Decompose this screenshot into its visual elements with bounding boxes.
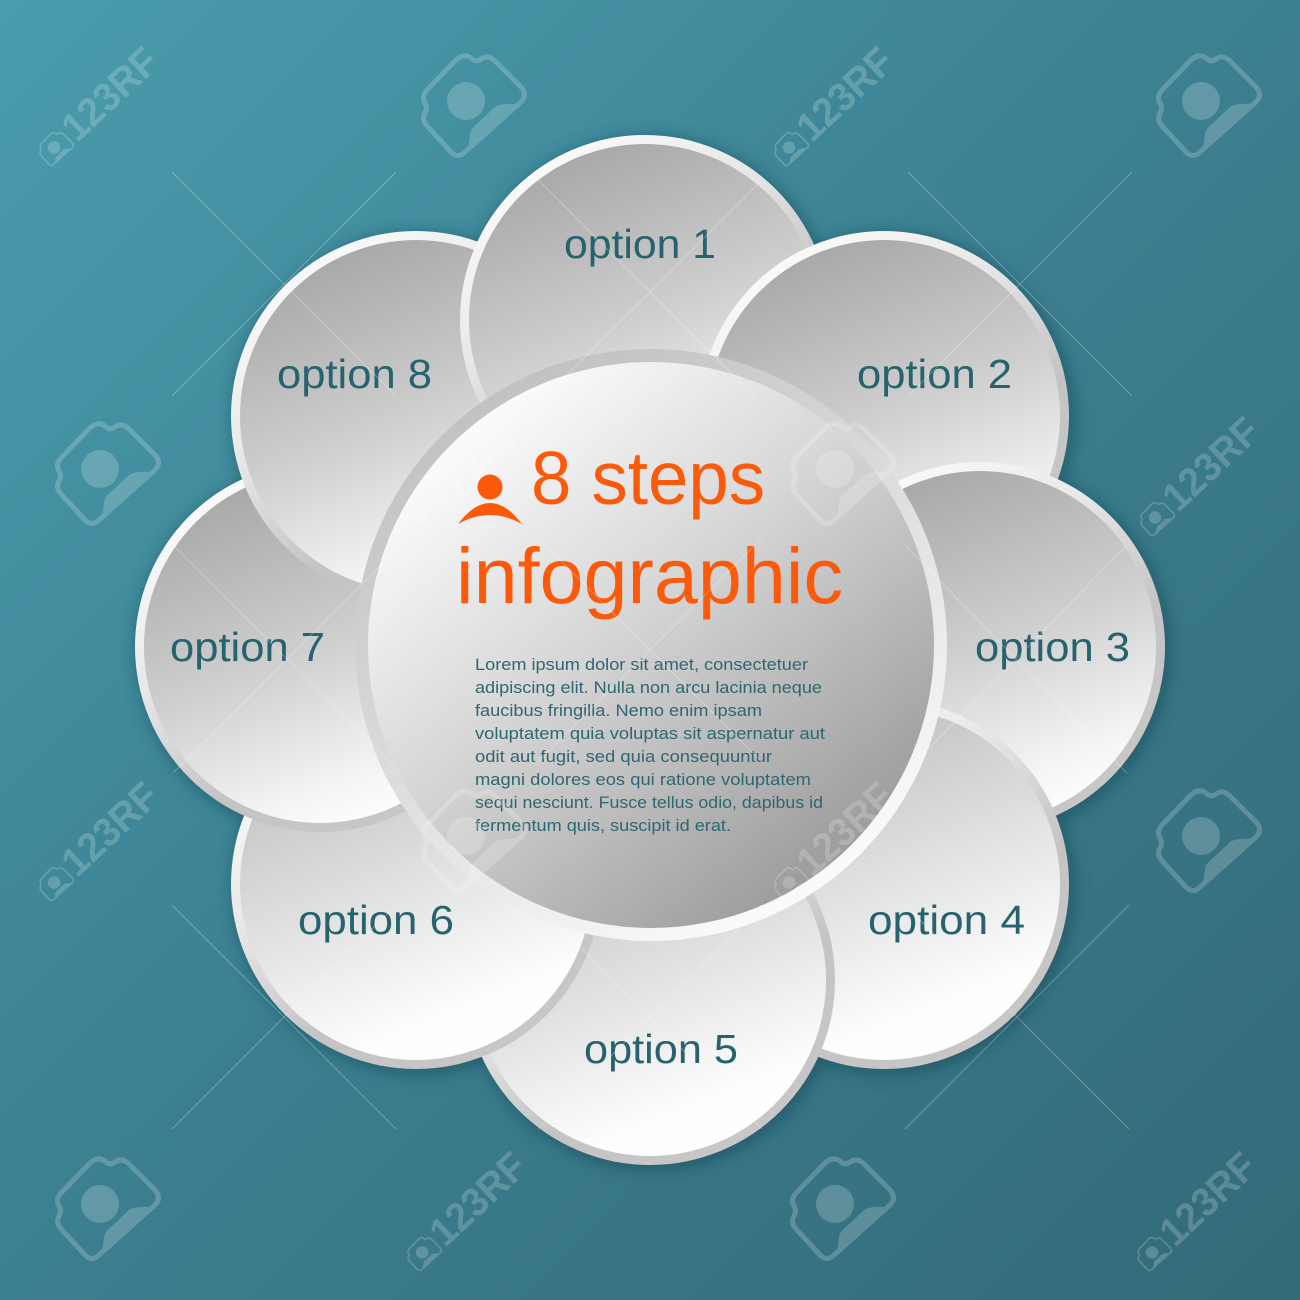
body text xyxy=(475,655,825,835)
petal: option 1 xyxy=(460,135,830,505)
petal: option 4 xyxy=(699,699,1069,1069)
watermark cross lines xyxy=(172,172,1132,1129)
body text: fermentum quis, suscipit id erat. xyxy=(475,816,731,835)
body text: faucibus fringilla. Nemo enim ipsam xyxy=(475,701,762,720)
watermarks: 123RF xyxy=(53,774,167,885)
option labels xyxy=(170,221,1130,1072)
body text: odit aut fugit, sed quia consequuntur xyxy=(475,747,773,766)
label: option 6: option 6 xyxy=(298,897,454,943)
watermarks: 123RF xyxy=(53,39,167,150)
body text: voluptatem quia voluptas sit aspernatur aut xyxy=(475,724,825,743)
title line: 8 steps: 8 steps xyxy=(531,436,765,520)
title xyxy=(456,436,843,620)
label: option 1: option 1 xyxy=(564,221,716,267)
flower drop shadow xyxy=(138,138,1168,1168)
petal: option 1 overlap on option 8 xyxy=(460,135,640,403)
petal: option 5 xyxy=(465,795,835,1165)
icon: person xyxy=(458,474,522,524)
body text: adipiscing elit. Nulla non arcu lacinia neque xyxy=(475,678,822,697)
watermarks: 123RF xyxy=(788,39,902,150)
body text: Lorem ipsum dolor sit amet, consectetuer xyxy=(475,655,809,674)
petal: option 3 xyxy=(795,462,1165,832)
label: option 8: option 8 xyxy=(277,351,432,397)
label: option 3: option 3 xyxy=(975,624,1130,670)
label: option 5: option 5 xyxy=(584,1026,738,1072)
watermarks: 123RF xyxy=(1154,409,1268,520)
label: option 7: option 7 xyxy=(170,624,325,670)
body text: sequi nesciunt. Fusce tellus odio, dapibus id xyxy=(475,793,823,812)
label: option 2: option 2 xyxy=(857,351,1012,397)
watermarks: 123RF xyxy=(421,1144,535,1255)
petal: option 7 xyxy=(135,462,505,832)
body text: magni dolores eos qui ratione voluptatem xyxy=(475,770,811,789)
center circle xyxy=(355,349,947,941)
petal: option 8 xyxy=(231,231,601,601)
watermarks: 123RF xyxy=(419,409,533,520)
label: option 4: option 4 xyxy=(868,897,1025,943)
watermarks: 123RF xyxy=(788,774,902,885)
petal: option 2 xyxy=(699,231,1069,601)
watermarks: 123RF xyxy=(1151,1144,1265,1255)
petal: option 6 xyxy=(231,699,601,1069)
title line: infographic: infographic xyxy=(456,531,843,620)
